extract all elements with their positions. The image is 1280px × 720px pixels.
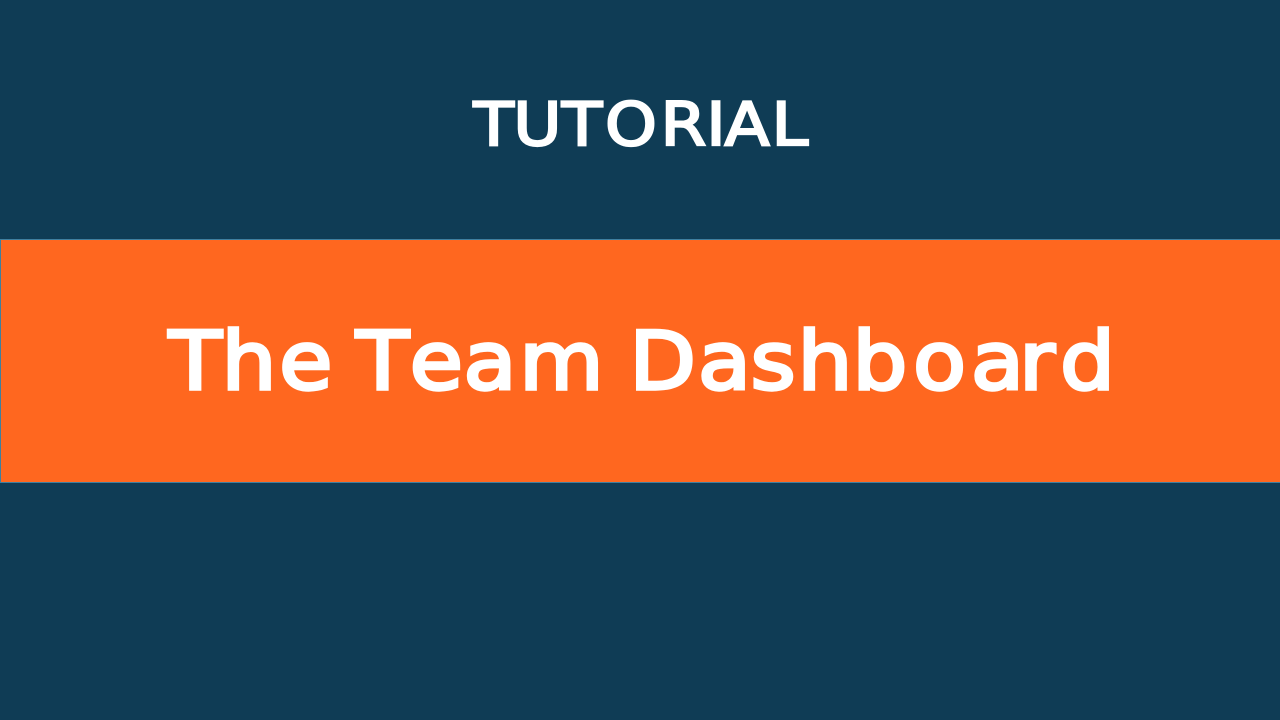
orange banner	[0, 240, 1280, 482]
title: The Team Dashboard	[168, 315, 1115, 408]
eyebrow heading: TUTORIAL	[473, 89, 808, 159]
